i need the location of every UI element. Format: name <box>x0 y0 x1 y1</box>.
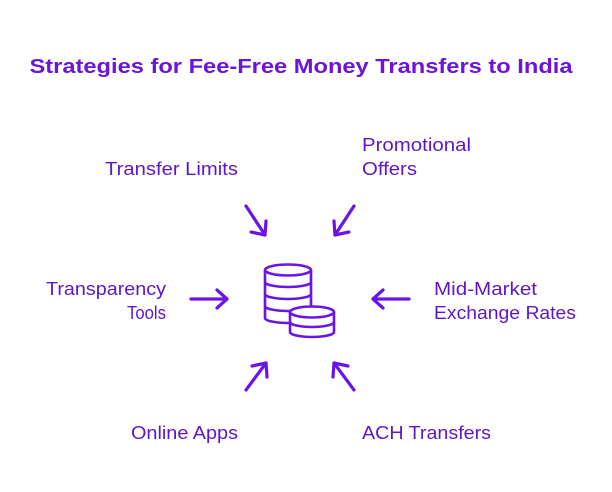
label: transparency tools <box>46 279 166 323</box>
arrow: right <box>373 290 409 308</box>
label: mid-market exchange rates <box>434 279 576 323</box>
arrow: bottom-right <box>333 363 354 390</box>
label: transparency tools: Transparency <box>46 279 166 299</box>
arrow: top-left <box>246 206 266 235</box>
label: promotional offers <box>362 135 471 179</box>
label: ACH transfers: ACH Transfers <box>362 423 491 443</box>
label: transparency tools: Tools <box>127 303 166 323</box>
title: Strategies for Fee-Free Money Transfers to India <box>30 56 574 78</box>
arrow: top-right <box>334 206 354 235</box>
label: mid-market exchange rates: Mid-Market <box>434 279 537 299</box>
label: transfer limits: Transfer Limits <box>105 159 238 179</box>
label: mid-market exchange rates: Exchange Rates <box>434 303 576 323</box>
label: online apps: Online Apps <box>131 423 238 443</box>
label: promotional offers: Promotional <box>362 135 471 155</box>
arrow: left <box>191 290 227 308</box>
arrow: bottom-left <box>246 363 267 390</box>
icon: coin stacks <box>265 264 334 337</box>
label: promotional offers: Offers <box>362 159 417 179</box>
arrows <box>191 206 409 390</box>
